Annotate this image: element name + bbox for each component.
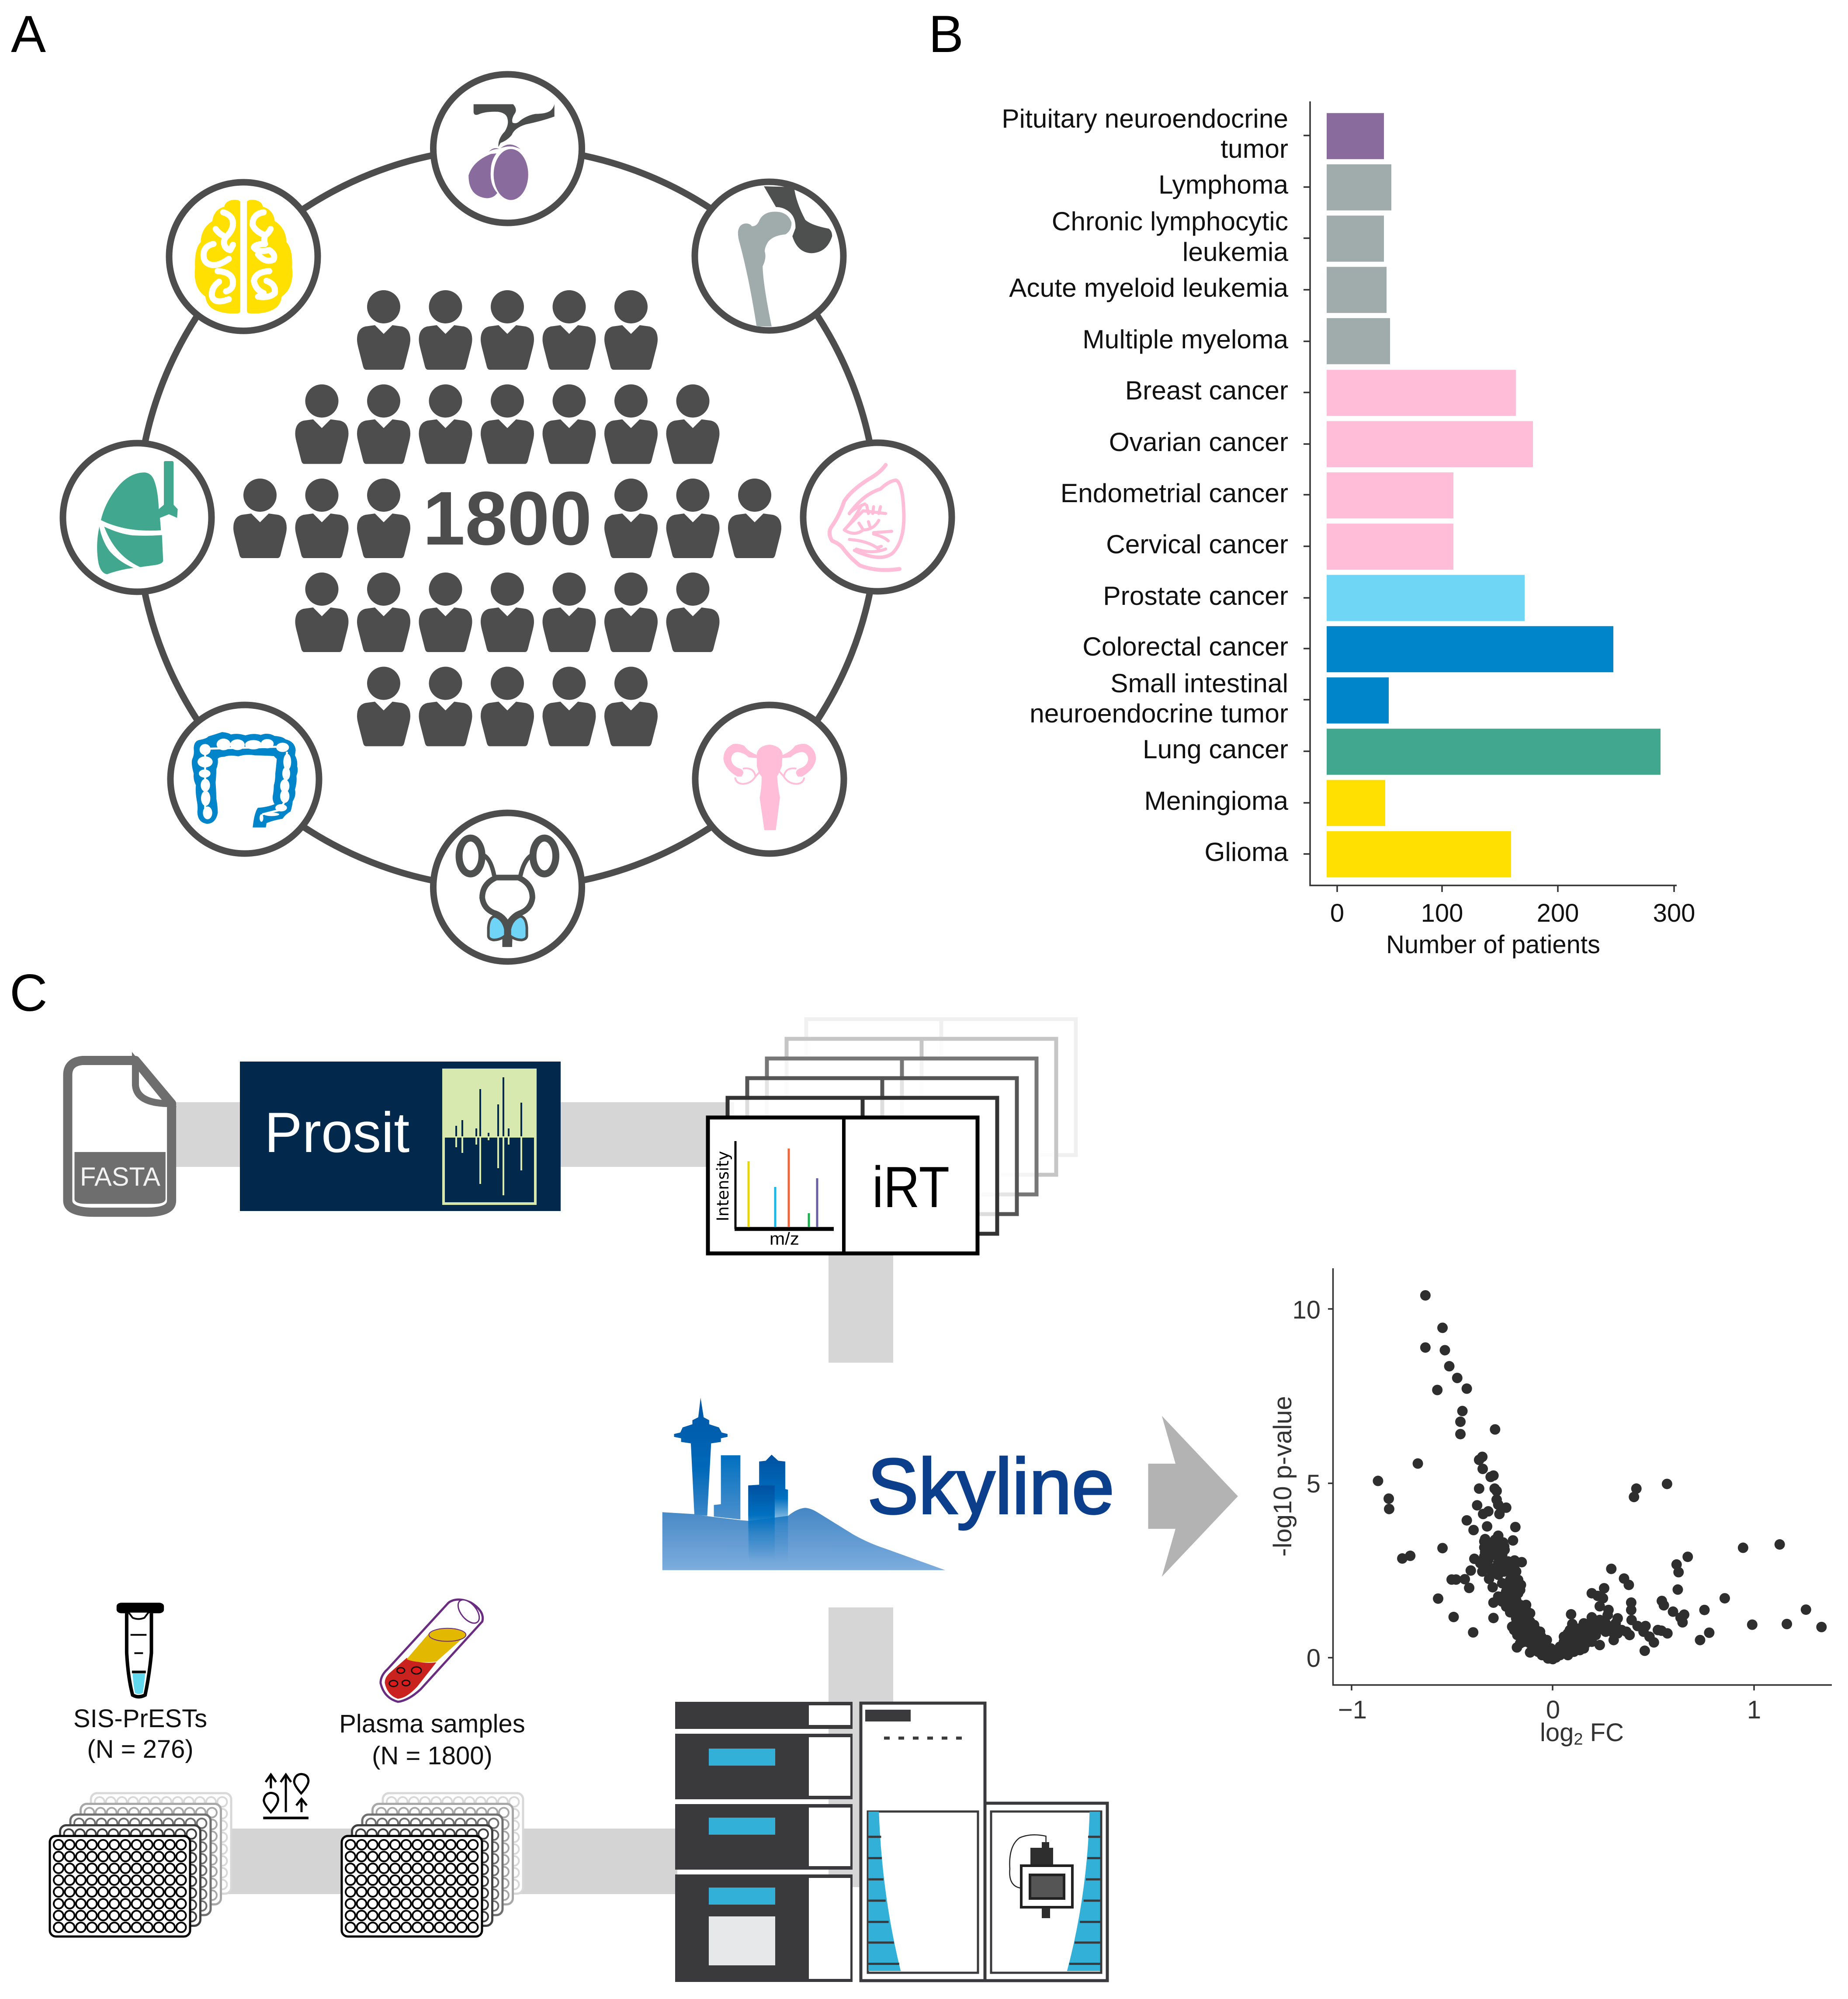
spectrum sketch: Intensity: [714, 1151, 732, 1222]
plasma samples label: (N = 1800): [372, 1742, 492, 1770]
spectral library card stack: [708, 1019, 1076, 1253]
category labels: neuroendocrine tumor: [1030, 698, 1288, 728]
Prosit box: [240, 1062, 561, 1211]
connector: plates to instrument: [218, 1829, 677, 1894]
x axis tick labels: [1330, 899, 1695, 927]
panel C: workflow: [50, 1019, 1238, 1982]
icon: breast: [803, 443, 952, 591]
icon: FASTA file: FASTA: [80, 1162, 160, 1191]
connector: mass spectrometer to Skyline: [829, 1607, 893, 1887]
category labels: tumor: [1220, 134, 1288, 163]
ion source: [1010, 1835, 1046, 1888]
front card: [708, 1117, 978, 1253]
panel A: patient cohort wheel: [63, 74, 952, 961]
Skyline logo: [662, 1398, 1114, 1570]
y axis title: -log10 p-value: [1269, 1396, 1297, 1557]
category labels: Breast cancer: [1125, 375, 1288, 405]
y axis tick labels: 5: [1307, 1470, 1321, 1498]
category labels: leukemia: [1182, 237, 1288, 267]
category labels: Prostate cancer: [1103, 581, 1288, 611]
Skyline wordmark: Skyline: [867, 1443, 1114, 1530]
spectrum sketch: m/z: [770, 1229, 799, 1249]
icon: FASTA file: [68, 1060, 172, 1212]
icon: bladder and prostate: [433, 813, 582, 961]
category labels: Lung cancer: [1143, 734, 1288, 764]
panel label C: C: [10, 964, 48, 1022]
volcano plot: [1269, 1268, 1832, 1749]
icon: lung: [63, 443, 211, 592]
volcano points: [1378, 1295, 1821, 1659]
category labels: Meningioma: [1144, 786, 1288, 816]
x axis tick labels: 0: [1330, 899, 1344, 927]
SIS-PrESTs label: (N = 276): [87, 1735, 194, 1763]
category labels: Cervical cancer: [1106, 529, 1288, 559]
category labels: [1002, 104, 1288, 867]
x axis tick labels: −1: [1338, 1696, 1367, 1724]
x axis title: Number of patients: [1386, 930, 1600, 959]
SIS-PrESTs label: SIS-PrESTs: [73, 1704, 207, 1733]
x axis tick labels: 300: [1653, 899, 1695, 927]
x axis tick labels: 100: [1421, 899, 1463, 927]
plasma samples label: Plasma samples: [339, 1710, 525, 1738]
x axis title: FC: [1583, 1718, 1624, 1747]
plasma samples label: [339, 1710, 525, 1770]
people icons: [233, 290, 781, 746]
icon: brain: [169, 182, 318, 331]
plate stack: SIS-PrESTs: [50, 1793, 231, 1937]
icon: pituitary: [433, 74, 582, 223]
icon: plasma tube: [381, 1597, 484, 1702]
panel label A: A: [11, 5, 46, 63]
panel B: bar chart of patients per cancer type: [1002, 101, 1695, 959]
x axis title: 2: [1574, 1730, 1583, 1749]
Prosit label: Prosit: [264, 1100, 409, 1164]
category labels: Lymphoma: [1158, 170, 1288, 199]
mass spectrometer: [861, 1703, 1107, 1981]
connector: library to Skyline: [829, 1250, 893, 1363]
category labels: Colorectal cancer: [1082, 632, 1288, 661]
category labels: Pituitary neuroendocrine: [1002, 104, 1288, 133]
x axis tick labels: [1338, 1696, 1761, 1724]
x axis tick labels: 1: [1747, 1696, 1761, 1724]
SIS-PrESTs label: [73, 1704, 207, 1763]
arrow to results: [1148, 1416, 1238, 1577]
category labels: Ovarian cancer: [1109, 427, 1288, 457]
iRT label: iRT: [872, 1155, 950, 1220]
icon: colon: [170, 705, 319, 854]
cohort ring: [137, 148, 877, 888]
bars: [1327, 113, 1661, 877]
category labels: Glioma: [1204, 837, 1288, 867]
y axis tick labels: 10: [1292, 1296, 1321, 1324]
y axis tick labels: 0: [1307, 1644, 1321, 1673]
icon: femur bone: [695, 182, 843, 330]
axes and ticks: [1304, 101, 1677, 892]
mirror spectrum: [442, 1069, 537, 1204]
panel label B: B: [929, 5, 964, 63]
plate stack: plasma samples: [342, 1793, 523, 1937]
y axis tick labels: [1292, 1296, 1321, 1673]
x axis tick labels: 0: [1546, 1696, 1560, 1724]
spectrum sketch: [714, 1141, 834, 1249]
volcano axes: [1328, 1268, 1832, 1690]
x axis title: log: [1540, 1718, 1574, 1747]
category labels: Small intestinal: [1110, 668, 1288, 698]
LC system: [675, 1702, 853, 1982]
icon: microtube SIS-PrESTs: [117, 1603, 164, 1697]
cohort size number: 1800: [423, 475, 592, 561]
category labels: Chronic lymphocytic: [1052, 206, 1288, 236]
connector: FASTA to spectral library: [170, 1102, 734, 1167]
icon: mixing step: [263, 1774, 309, 1818]
x axis tick labels: 200: [1537, 899, 1579, 927]
icon: uterus: [695, 705, 844, 854]
category labels: Acute myeloid leukemia: [1009, 273, 1288, 302]
category labels: Multiple myeloma: [1082, 324, 1288, 354]
category labels: Endometrial cancer: [1061, 478, 1288, 508]
